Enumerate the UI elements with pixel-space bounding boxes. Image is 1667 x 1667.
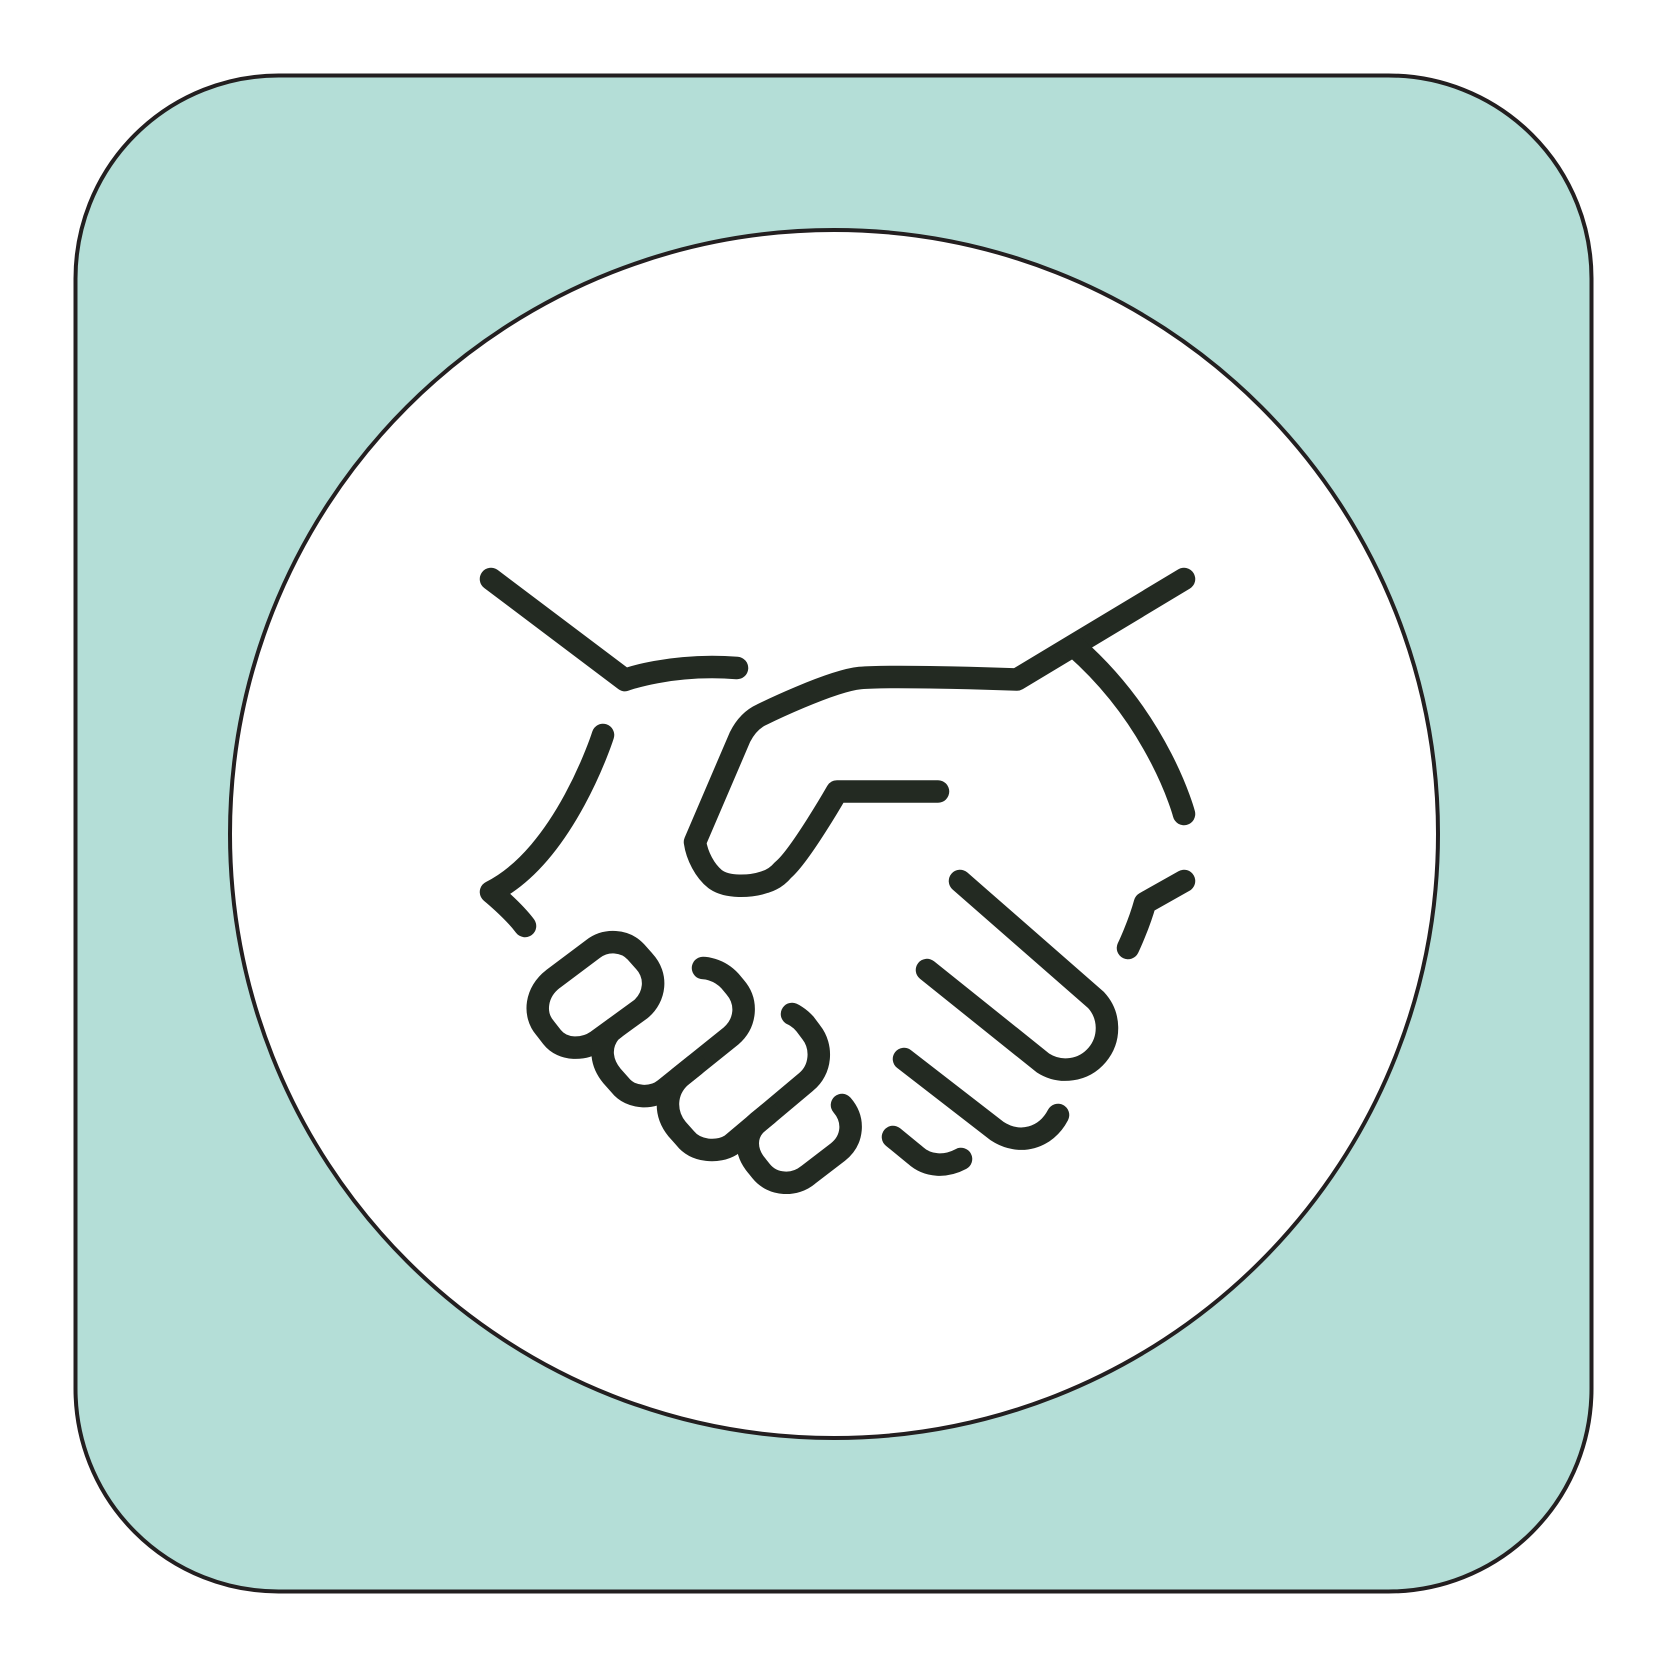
left cuff <box>491 579 737 680</box>
right hand long finger <box>927 881 1107 1070</box>
left hand finger one <box>538 942 653 1048</box>
left hand finger two <box>603 968 744 1096</box>
right hand middle finger <box>904 1059 1058 1139</box>
left hand finger four <box>748 1105 851 1183</box>
icon: handshake <box>491 579 1184 1183</box>
right wrist segment <box>1128 881 1184 948</box>
upper hand with thumb and right cuff <box>695 579 1184 886</box>
panel: white circle <box>230 230 1438 1438</box>
left forearm arc <box>491 735 603 926</box>
left hand finger three <box>668 1014 819 1150</box>
right forearm arc <box>1075 647 1184 814</box>
right hand short finger <box>893 1137 961 1165</box>
